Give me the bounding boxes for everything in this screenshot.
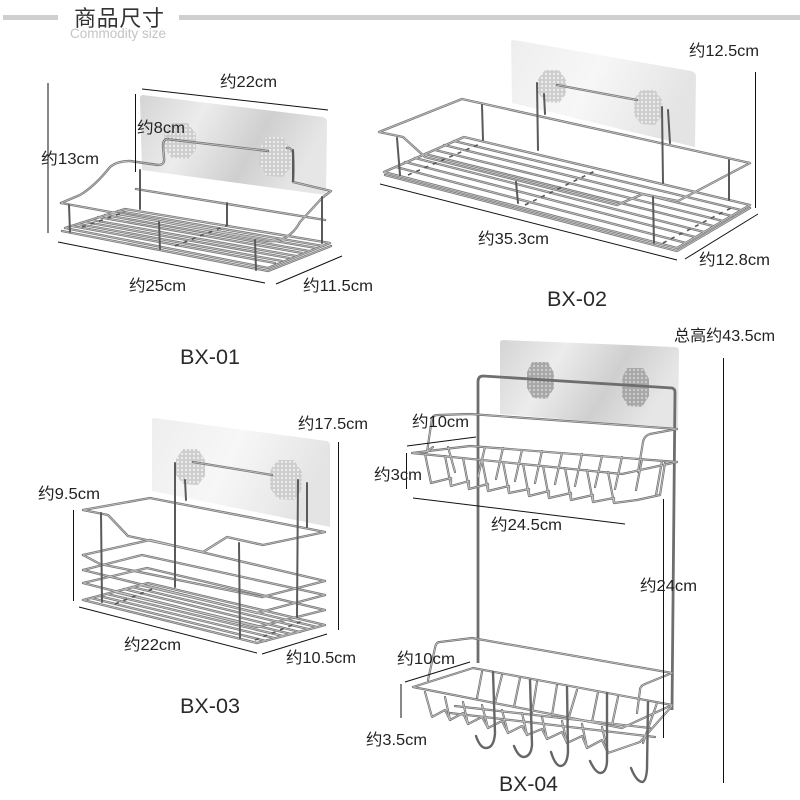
product: BX-04	[412, 340, 679, 782]
labels BX-03: 约22cm	[124, 636, 181, 654]
dimension lines BX-03	[74, 442, 338, 654]
labels BX-01: 约25cm	[129, 277, 186, 295]
model name BX-04: BX-04	[499, 773, 558, 796]
adhesive plate	[140, 95, 327, 195]
labels BX-04: 约24cm	[640, 577, 697, 595]
labels BX-04: 约24.5cm	[491, 516, 562, 534]
labels BX-03: 约17.5cm	[298, 415, 368, 433]
wire rack	[61, 139, 331, 271]
labels BX-04	[366, 327, 775, 749]
labels BX-03: 约9.5cm	[38, 485, 100, 503]
suction cups	[538, 70, 662, 125]
labels BX-02: 约12.8cm	[699, 251, 770, 269]
labels BX-01: 约13cm	[41, 150, 99, 168]
wire rack	[412, 414, 677, 782]
dimension lines BX-02	[380, 72, 758, 260]
product: BX-03	[83, 418, 330, 643]
product: BX-01	[61, 95, 331, 271]
labels BX-04: 总高约43.5cm	[674, 327, 775, 345]
labels BX-04: 约10cm	[397, 650, 455, 668]
product: BX-02	[379, 40, 750, 251]
labels BX-04: 约10cm	[412, 413, 469, 431]
model name BX-03: BX-03	[180, 695, 240, 718]
heading left bar	[3, 15, 58, 20]
labels BX-02: 约35.3cm	[478, 230, 549, 248]
labels BX-01: 约11.5cm	[303, 277, 373, 295]
dimension lines BX-01	[48, 83, 342, 284]
wire rack	[379, 83, 750, 251]
heading: product size	[3, 6, 800, 41]
outer frame	[478, 376, 675, 710]
heading right bar	[179, 15, 800, 20]
labels BX-01	[41, 73, 373, 295]
labels BX-03: 约10.5cm	[286, 649, 356, 667]
adhesive plate	[500, 340, 679, 429]
suction cups	[527, 362, 649, 407]
subtitle: Commodity size	[70, 25, 166, 41]
model name BX-02: BX-02	[547, 288, 607, 311]
hooks	[476, 672, 648, 782]
suction cups	[164, 123, 291, 177]
labels BX-01: 约8cm	[137, 119, 185, 137]
adhesive plate	[511, 40, 696, 147]
labels BX-04: 约3cm	[374, 466, 422, 484]
labels BX-01: 约22cm	[220, 73, 277, 91]
wire rack	[83, 462, 325, 643]
adhesive plate	[152, 418, 330, 527]
labels BX-04: 约3.5cm	[366, 731, 427, 749]
dimension lines BX-04	[401, 358, 724, 783]
suction cups	[176, 449, 302, 500]
labels BX-03	[38, 415, 368, 667]
labels BX-02	[478, 42, 770, 269]
title: 商品尺寸	[74, 6, 164, 31]
model name BX-01: BX-01	[180, 346, 240, 369]
labels BX-02: 约12.5cm	[689, 42, 759, 60]
